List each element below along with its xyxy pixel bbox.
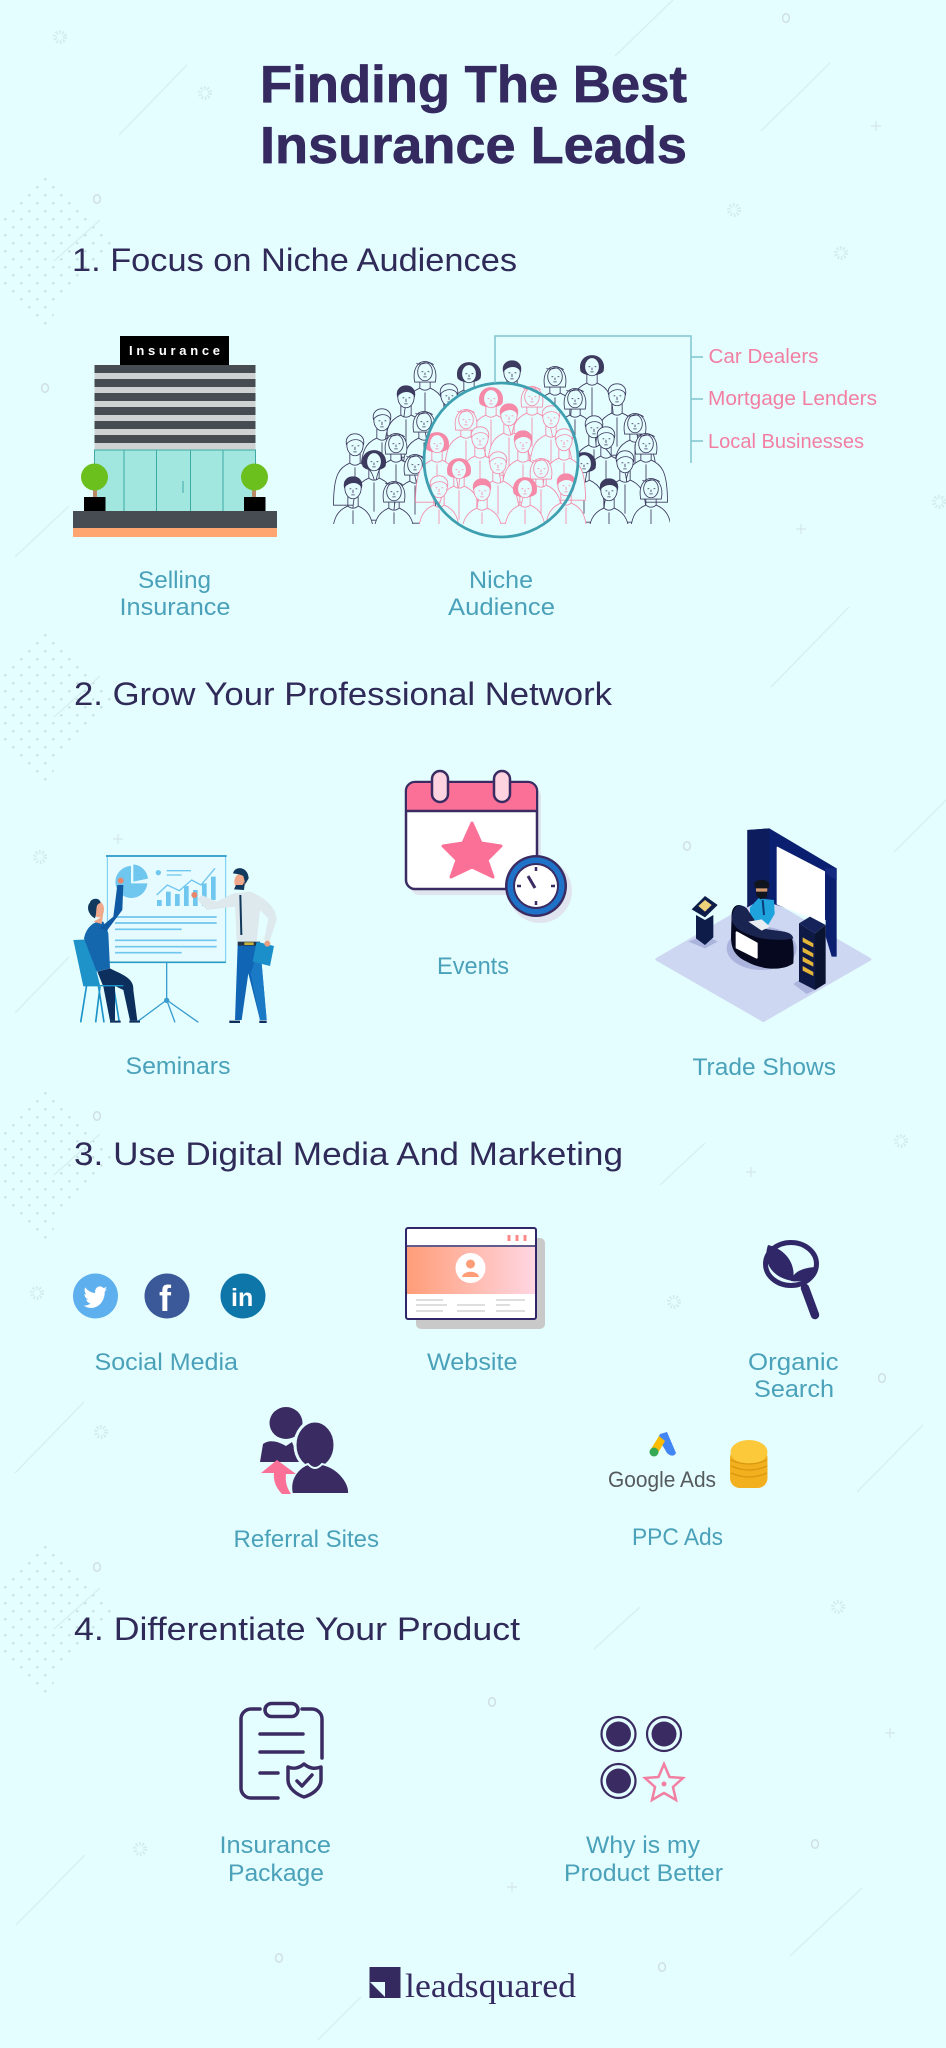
icon: insurance clipboard <box>241 1704 322 1798</box>
icon: seminar illustration <box>73 856 277 1023</box>
icon: social media circles <box>73 1274 266 1319</box>
label: why is my product better: Product Better <box>564 1860 723 1887</box>
label: why is my product better <box>564 1832 723 1887</box>
label: trade shows: Trade Shows <box>692 1054 836 1081</box>
label: events: Events <box>437 953 509 980</box>
icon: product options with star <box>602 1717 683 1800</box>
label: selling insurance: Insurance <box>120 594 230 621</box>
label: insurance package <box>220 1832 331 1887</box>
heading: section 3: 3. Use Digital Media And Marketing <box>74 1136 623 1172</box>
label: insurance package: Package <box>228 1860 324 1887</box>
title: Finding The Best <box>260 56 687 114</box>
label: referral sites: Referral Sites <box>234 1526 379 1553</box>
label: niche audience: Niche <box>469 567 533 594</box>
title: Insurance Leads <box>260 117 687 175</box>
list: niche segments: Local Businesses <box>708 431 864 453</box>
label: seminars: Seminars <box>126 1053 230 1080</box>
icon: google ads and coins <box>608 1432 768 1492</box>
label: website: Website <box>427 1349 518 1376</box>
heading: section 4: 4. Differentiate Your Product <box>74 1611 520 1647</box>
label: organic search: Organic <box>748 1349 838 1376</box>
list: niche segments <box>708 346 877 453</box>
icon: social media circles: in <box>231 1284 253 1312</box>
icon: google ads and coins: Google Ads <box>608 1467 716 1492</box>
label: niche audience: Audience <box>448 594 555 621</box>
label: selling insurance <box>120 567 230 621</box>
label: selling insurance: Selling <box>138 567 211 594</box>
list: niche segments: Mortgage Lenders <box>708 388 877 410</box>
icon: trade show booth <box>657 828 870 1021</box>
label: insurance package: Insurance <box>220 1832 331 1859</box>
label: why is my product better: Why is my <box>586 1832 700 1859</box>
icon: insurance building <box>73 336 277 537</box>
icon: calendar with clock <box>406 771 572 923</box>
logo: leadsquared: leadsquared <box>405 1968 576 2005</box>
heading: section 2: 2. Grow Your Professional Network <box>74 676 613 712</box>
icon: organic search magnifier <box>766 1242 816 1315</box>
icon: referral people <box>260 1407 349 1494</box>
chart: niche audience crowd <box>332 356 672 550</box>
title <box>260 56 687 175</box>
label: ppc ads: PPC Ads <box>632 1524 723 1551</box>
bracket: audience connector <box>495 336 703 463</box>
label: organic search <box>748 1349 838 1403</box>
list: niche segments: Car Dealers <box>708 346 818 368</box>
label: social media: Social Media <box>94 1349 239 1376</box>
label: organic search: Search <box>754 1376 834 1403</box>
icon: website window <box>406 1228 545 1329</box>
icon: social media circles: f <box>159 1278 172 1319</box>
label: niche audience <box>448 567 555 621</box>
icon: insurance building: Insurance <box>129 343 220 358</box>
heading: section 1: 1. Focus on Niche Audiences <box>72 242 517 278</box>
